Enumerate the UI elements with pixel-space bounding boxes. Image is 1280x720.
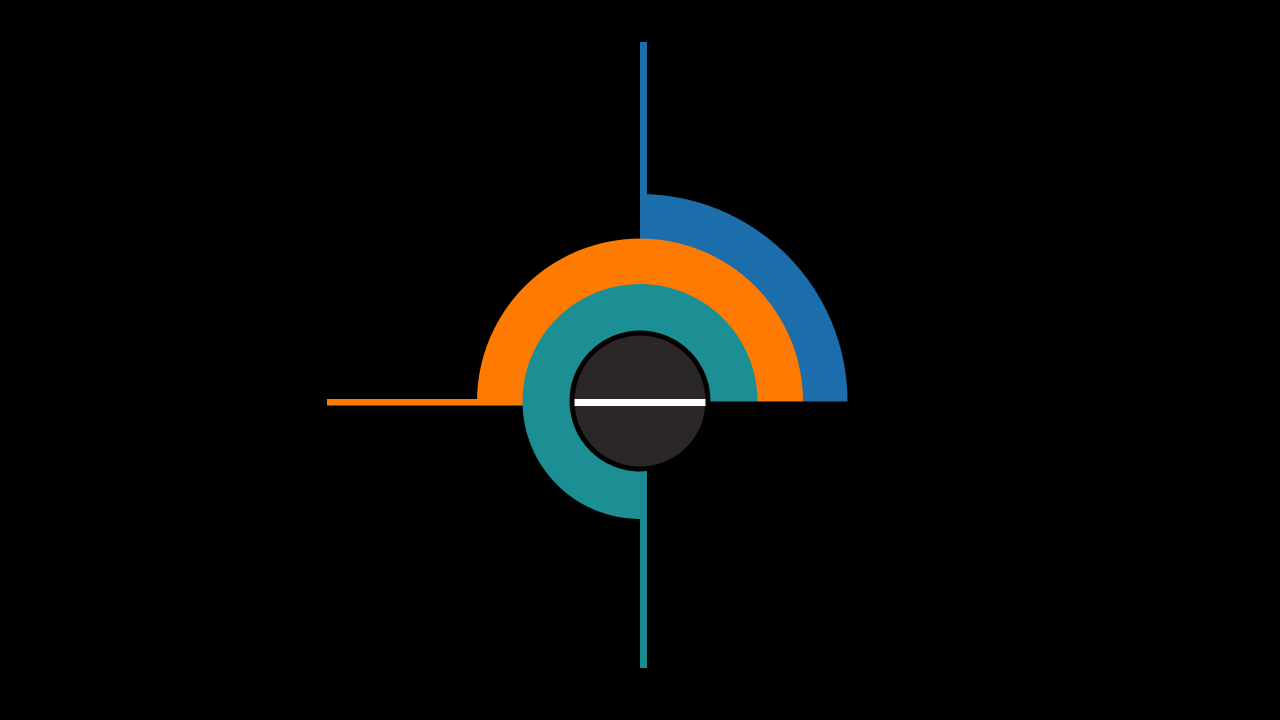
blue series: quarter arc with vertical line <box>640 42 848 402</box>
hub white bar <box>574 399 706 406</box>
center hub <box>570 330 710 472</box>
teal series: three-quarter arc with vertical line <box>522 284 758 668</box>
orange series: half arc with horizontal line <box>327 239 803 406</box>
